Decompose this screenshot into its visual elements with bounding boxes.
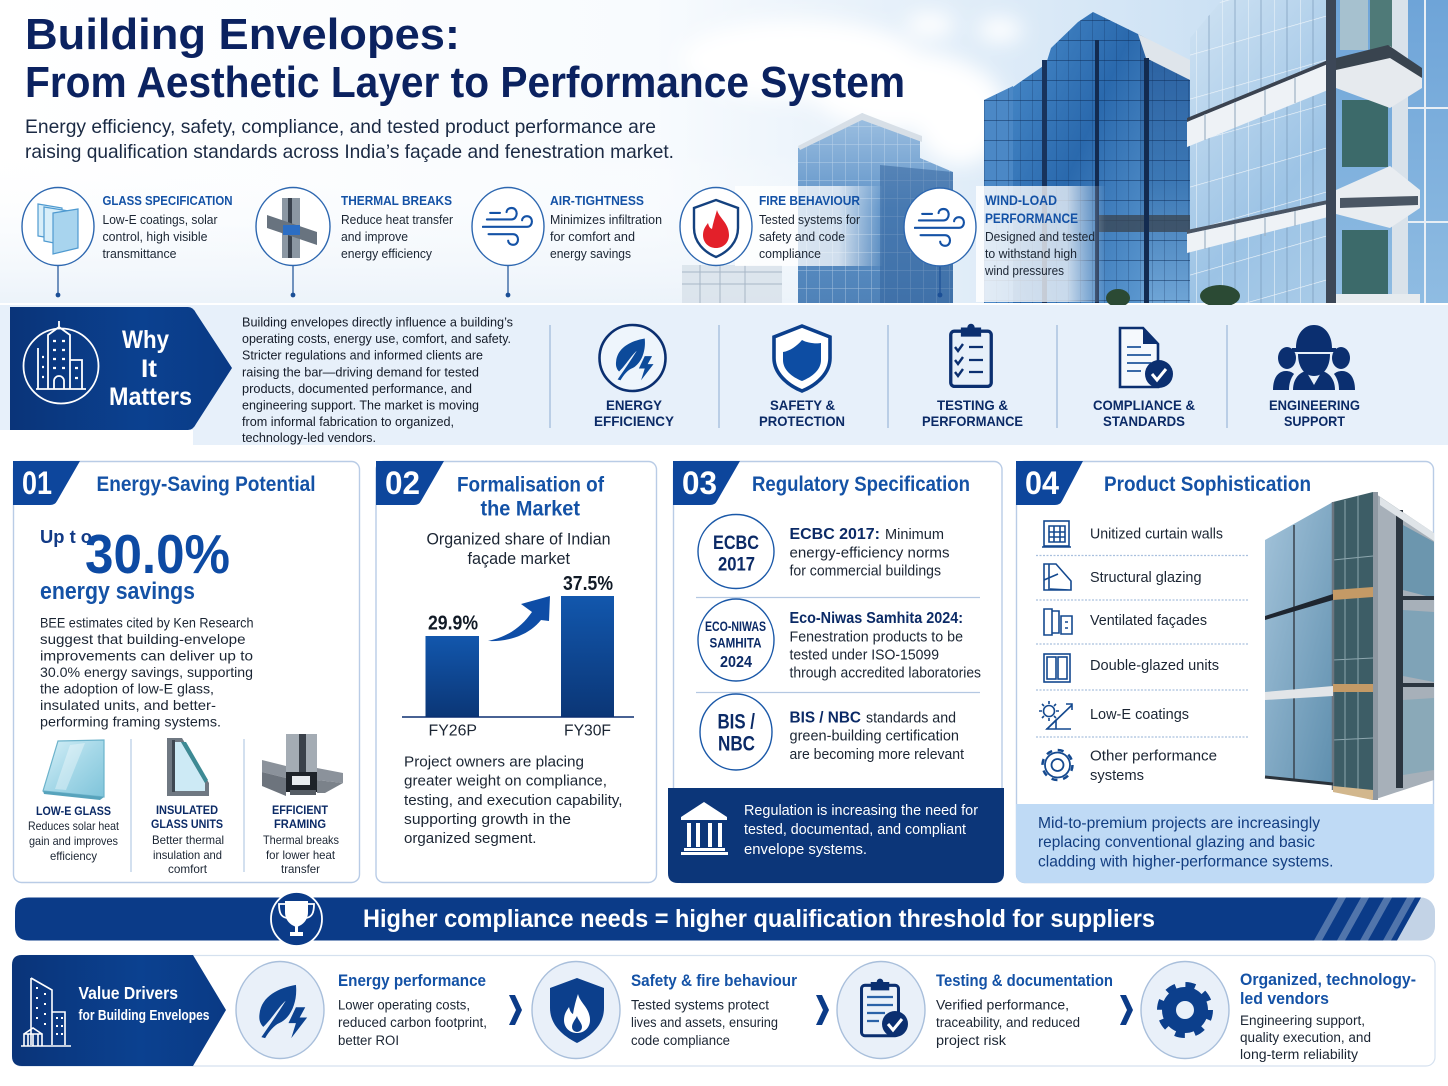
body text: suggest that building-envelope [40,631,246,647]
item: low-e glass: efficiency [50,849,97,863]
regulation: Eco-Niwas Samhita 2024: through accredited laboratories [790,664,981,682]
subtitle: Energy efficiency, safety, compliance, and tested product performance are [25,116,656,138]
body text [40,614,254,730]
feature: wind-load performance: WIND-LOAD [985,193,1057,208]
feature: fire behaviour [680,188,861,266]
pillar: energy efficiency: ENERGY [606,397,663,413]
panel: 01 energy-saving potential [13,461,360,882]
why it matters paragraph: raising the bar—driving demand for tested [242,364,479,380]
product list: Structural glazing [1090,569,1202,586]
product list: systems [1090,767,1144,784]
pillar: energy efficiency: EFFICIENCY [594,413,675,429]
hero photo: sky and glass towers [0,0,1448,307]
distant buildings [682,265,782,303]
icon: glass panes [22,188,94,297]
why it matters paragraph: Stricter regulations and informed clients are [242,348,483,362]
item: insulated glass units: INSULATED [156,803,218,817]
value drivers arrow badge [12,955,226,1066]
why it matters paragraph: technology-led vendors. [242,430,376,445]
why it matters arrow badge [10,307,232,430]
number tab 02: 02 [385,465,420,501]
pillar: testing and performance: PERFORMANCE [922,413,1023,429]
body text: improvements can deliver up to [40,648,253,664]
regulation: ECBC 2017 [698,514,950,588]
driver: organized technology-led vendors: long-term reliability [1240,1047,1358,1062]
item: insulated glass units [151,738,224,876]
icon: engineers with hard hat [1273,325,1355,390]
body text: 30.0% energy savings, supporting [40,664,253,680]
item: low-e glass: gain and improves [29,834,118,848]
arrow [488,596,550,641]
regulation: Eco-Niwas Samhita 2024: tested under ISO-15099 [790,646,939,664]
feature: wind-load performance: PERFORMANCE [985,211,1078,226]
translucent caption plates [735,186,1106,302]
driver: energy performance: reduced carbon footprint, [338,1015,487,1030]
product list: Double-glazed units [1090,657,1219,674]
driver: organized technology-led vendors: quality execution, and [1240,1030,1371,1045]
panel: 03 regulatory specification [668,461,1004,883]
regulation: Eco-Niwas Samhita 2024: Eco-Niwas Samhita 2024: [790,610,963,627]
icon: trophy [271,892,322,946]
item: efficient framing: FRAMING [274,817,326,831]
driver: organized technology-led vendors: Organized, technology- [1240,970,1416,989]
pillar: safety and protection: SAFETY & [770,397,835,413]
body text: organized segment. [404,830,536,847]
feature: thermal breaks: energy efficiency [341,246,432,261]
driver: safety and fire behaviour: Tested systems protect [631,998,769,1012]
heading: Energy-Saving Potential [96,473,316,496]
bar chart: FY30F [564,722,611,740]
item: low-e glass [28,740,120,863]
driver: organized technology-led vendors: led vendors [1240,989,1329,1008]
panel: 02 formalisation of the market [376,461,656,882]
icon: double glazed unit [1044,654,1070,682]
feature: glass specification: Low-E coatings, solar [102,212,218,227]
icon: checklist clipboard [951,324,991,386]
driver: testing and documentation: project risk [936,1033,1006,1048]
pillar: engineering support: ENGINEERING [1269,397,1360,413]
feature: fire behaviour: compliance [759,246,821,261]
banner: higher compliance needs [15,892,1435,946]
item: efficient framing: EFFICIENT [272,803,329,817]
callout: mid-to-premium note: Mid-to-premium projects are increasingly [1038,815,1320,832]
body text: insulated units, and better- [40,697,216,713]
big stat: Up t o [40,527,92,547]
product list: Low-E coatings [1090,706,1189,723]
icon: ventilated facade [1044,609,1072,635]
why it matters paragraph: operating costs, energy use, comfort, and safety. [242,331,511,346]
big stat: 30.0% [85,523,230,585]
body text: supporting growth in the [404,811,571,828]
icon: institution [681,802,728,855]
driver: safety and fire behaviour: lives and assets, ensuring [631,1015,778,1030]
driver: energy performance [236,962,487,1058]
badge: ECBC [713,533,759,554]
subtitle [25,116,674,163]
tower C [1187,0,1448,303]
body text: Project owners are placing [404,754,584,770]
feature: glass specification [22,188,232,297]
why it matters paragraph: Building envelopes directly influence a building’s [242,314,513,330]
why it matters paragraph: from informal fabrication to organized, [242,414,454,429]
pillar: safety and protection: PROTECTION [759,413,845,429]
number tab 01 [13,461,80,505]
feature: glass specification: transmittance [102,246,176,261]
feature: air-tightness: Minimizes infiltration [550,212,662,227]
panel: why it matters band [0,305,1448,445]
number tab 04 [1016,461,1083,505]
item: efficient framing: for lower heat [266,848,336,862]
driver: safety and fire behaviour: Safety & fire behaviour [631,971,797,990]
title: From Aesthetic Layer to Performance System [25,58,905,107]
heading: Regulatory Specification [752,473,970,496]
panel: 04 product sophistication [1016,461,1434,883]
badge: NBC [718,732,755,756]
body text: testing, and execution capability, [404,792,622,809]
driver: energy performance: better ROI [338,1033,399,1048]
body text: BEE estimates cited by Ken Research [40,614,254,630]
item: insulated glass units: insulation and [153,848,222,862]
value drivers arrow badge: Value Drivers [78,983,178,1003]
heading [457,474,605,520]
icon: gear [1141,962,1229,1058]
feature: thermal breaks: THERMAL BREAKS [341,193,452,208]
why it matters arrow badge: Why [122,326,169,354]
icon: document with check [1120,328,1173,388]
regulation: ECBC 2017: energy-efficiency norms [790,544,950,562]
icon: gear [1042,750,1072,780]
chart caption: Organized share of Indian [426,530,610,548]
callout: regulation note [668,788,1004,883]
driver: testing and documentation: traceability, and reduced [936,1015,1080,1030]
icon: city in circle [24,321,98,404]
feature: glass specification: GLASS SPECIFICATION [102,193,232,208]
driver: testing and documentation: Verified performance, [936,998,1069,1012]
value drivers arrow badge: for Building Envelopes [78,1008,210,1024]
feature: glass specification: control, high visible [102,229,208,244]
item: low-e glass: Reduces solar heat [28,819,120,833]
tower A [798,113,953,303]
regulation: BIS / NBC: BIS / NBC [790,710,861,726]
item: efficient framing: transfer [281,862,320,876]
badge [698,514,774,588]
feature: thermal breaks: Reduce heat transfer [341,212,454,227]
feature: fire behaviour: Tested systems for [759,212,861,227]
icon: clipboard with check [837,962,925,1058]
why it matters paragraph: engineering support. The market is moving [242,398,479,412]
badge: BIS / [718,710,755,734]
image: aluminium profile [262,734,343,796]
driver: energy performance: Lower operating costs, [338,998,470,1012]
body text: greater weight on compliance, [404,772,607,790]
bar chart [402,573,634,740]
pillar: testing and performance [922,324,1023,429]
icon: air flow [472,188,544,297]
chart caption [426,530,610,568]
heading: the Market [480,498,580,520]
badge: SAMHITA [710,634,762,650]
subtitle: raising qualification standards across India’s façade and fenestration market. [25,141,674,163]
callout: mid-to-premium note: cladding with higher-performance systems. [1038,854,1334,870]
badge: 2017 [718,554,755,576]
chart caption: façade market [468,549,570,568]
feature: thermal breaks: and improve [341,229,408,244]
icon: wind [904,188,976,297]
pillar: compliance and standards: STANDARDS [1103,413,1185,429]
regulation: BIS / NBC [700,694,965,770]
title: Building Envelopes: [25,10,460,59]
why it matters arrow badge: Matters [109,383,192,411]
feature: air-tightness: AIR-TIGHTNESS [550,193,644,208]
item: efficient framing [262,734,343,876]
image: double glazed section [167,738,209,796]
regulation: ECBC 2017: Minimum [885,526,944,543]
regulation: ECBC 2017: for commercial buildings [790,562,941,580]
item: insulated glass units: GLASS UNITS [151,817,223,831]
product list: Unitized curtain walls [1090,526,1223,542]
pillar: compliance and standards: COMPLIANCE & [1093,397,1195,413]
pillar: testing and performance: TESTING & [937,397,1008,413]
product list: Ventilated façades [1090,612,1207,629]
icon: shield with flame [532,962,620,1058]
driver: safety and fire behaviour: code compliance [631,1033,730,1048]
number tab 03: 03 [682,465,717,501]
icon: curtain wall grid [1042,521,1071,547]
regulation: ECBC 2017: ECBC 2017: [790,526,880,543]
feature: air-tightness: for comfort and [550,229,635,244]
feature: air-tightness [472,188,662,297]
number tab 03 [673,461,740,505]
icon: low-e coating sun [1039,701,1072,729]
image: glass sheet [43,740,104,800]
banner: higher compliance needs: Higher compliance needs = higher qualification threshold for suppliers [363,905,1155,933]
icon: shield [774,326,830,391]
arrow [816,995,829,1025]
icon: city [21,978,71,1046]
title [25,10,905,107]
tower B [984,12,1190,303]
body text: the adoption of low-E glass, [40,680,214,696]
pillar: energy efficiency [594,325,675,429]
feature: wind-load performance: Designed and tested [985,229,1095,244]
regulation: BIS / NBC: are becoming more relevant [790,746,965,763]
bar chart: FY26P [428,722,477,740]
driver: organized technology-led vendors: Engineering support, [1240,1013,1365,1028]
item: insulated glass units: Better thermal [152,833,224,847]
pillar: engineering support: SUPPORT [1284,413,1345,429]
badge: ECO-NIWAS [705,618,766,634]
heading: Product Sophistication [1104,473,1311,496]
pillar: compliance and standards [1093,328,1195,429]
callout: regulation note: envelope systems. [744,842,867,858]
feature: wind-load performance: to withstand high [985,246,1077,261]
item: insulated glass units: comfort [168,862,208,876]
item: low-e glass: LOW-E GLASS [36,804,111,818]
icon: leaf and bolt [236,962,324,1058]
feature: wind-load performance [904,188,1095,297]
badge [698,599,774,681]
feature: thermal breaks [256,188,454,297]
icon: fire shield [680,188,752,266]
badge [700,694,772,770]
callout: mid-to-premium note: replacing conventional glazing and basic [1038,834,1315,851]
regulation: Eco-Niwas Samhita 2024: Fenestration products to be [790,628,963,646]
image: curtain wall section building [1265,492,1434,800]
feature: wind-load performance: wind pressures [984,263,1064,278]
feature: fire behaviour: safety and code [759,229,845,244]
number tab 04: 04 [1025,465,1059,501]
arrow [509,995,522,1025]
number tab 01: 01 [22,465,52,501]
callout: regulation note: tested, documentad, and compliant [744,822,966,838]
pillar: safety and protection [759,326,845,429]
tree tops [1106,285,1240,307]
regulation: BIS / NBC: green-building certification [790,728,959,744]
feature: fire behaviour: FIRE BEHAVIOUR [759,193,861,208]
heading: Formalisation of [457,474,605,496]
arrow [1120,995,1133,1025]
callout: mid-to-premium note [1016,804,1434,883]
driver: testing and documentation: Testing & documentation [936,971,1113,990]
driver: safety and fire behaviour [532,962,797,1058]
why it matters paragraph [242,314,513,445]
regulation: Eco-Niwas Samhita 2024 [698,599,981,682]
big stat: energy savings [40,578,195,605]
why it matters paragraph: products, documented performance, and [242,381,472,396]
product list: Other performance [1090,748,1217,764]
driver: testing and documentation [837,962,1113,1058]
callout: regulation note: Regulation is increasing the need for [744,803,978,819]
icon: leaf and bolt in circle [600,325,666,391]
bar chart: 37.5% [563,573,613,595]
icon: thermal break profile [256,188,330,297]
pillar: engineering support [1269,325,1360,429]
why it matters arrow badge: It [141,355,158,383]
panel: value drivers strip [12,955,1435,1066]
badge: 2024 [720,654,752,671]
feature: air-tightness: energy savings [550,246,631,261]
driver: organized technology-led vendors [1141,962,1416,1062]
driver: energy performance: Energy performance [338,971,486,990]
number tab 02 [376,461,444,505]
body text [404,754,622,847]
regulation: BIS / NBC: standards and [866,710,956,726]
body text: performing framing systems. [40,714,221,730]
product list [1036,521,1249,784]
icon: structural glazing [1044,564,1071,590]
item: efficient framing: Thermal breaks [263,833,339,847]
big stat [40,523,230,605]
bar chart: 29.9% [428,612,478,634]
